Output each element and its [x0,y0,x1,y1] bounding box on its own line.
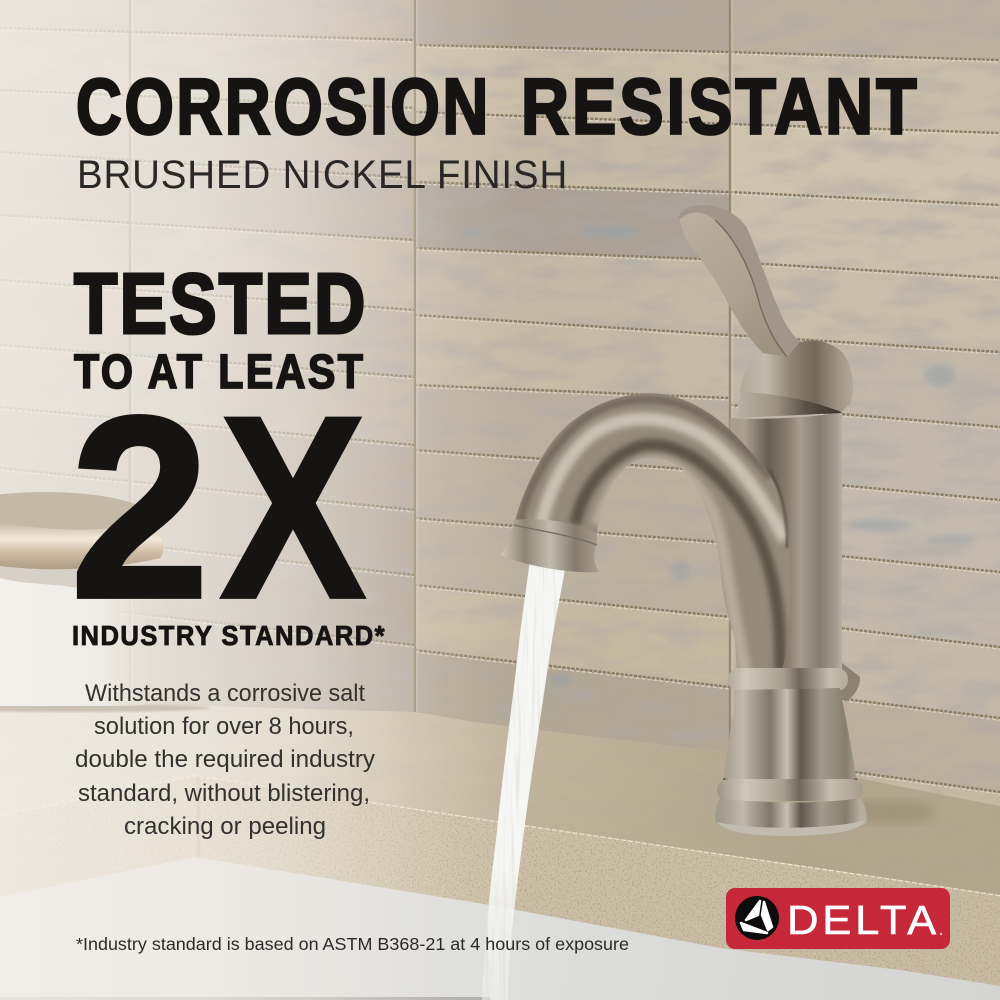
faucet [500,205,935,836]
collar ring [728,668,848,691]
logo wordmark: DELTA [787,898,940,943]
lever front face [679,212,787,357]
white basin of the sink [0,857,1000,1000]
icon: delta triangle mark [735,896,779,940]
claim: tested to at least 2x [70,256,386,653]
handle lever [678,205,802,357]
drain lift lever [838,663,860,702]
running water stream [482,564,565,1000]
footnote: *Industry standard is based on ASTM B368-21 at 4 hours of exposure [76,934,629,954]
claim: tested to at least 2x: TESTED [74,256,368,351]
description text: cracking or peeling [124,813,326,840]
description text: double the required industry [75,746,376,773]
handle dome cap [740,340,853,412]
description text [75,680,376,840]
claim: tested to at least 2x: 2 [70,363,210,653]
bottom edge strip [0,997,490,1000]
lower ring [717,779,863,801]
title: corrosion resistant: CORROSION [76,63,491,151]
grey gasket [716,820,866,836]
description text: solution for over 8 hours, [94,713,354,740]
delta logo [726,888,950,949]
spout nozzle [500,519,599,572]
claim: tested to at least 2x: X [220,362,366,652]
shadow on counter [845,800,935,824]
countertop front edge [0,770,1000,990]
neck under the handle dome [737,390,842,418]
tapered base [723,688,857,782]
description text: standard, without blistering, [78,780,370,807]
foot of the base [715,798,867,832]
curved spout [516,393,790,668]
faucet body column [730,412,842,672]
title: corrosion resistant [76,63,920,151]
title: corrosion resistant: RESISTANT [521,63,920,151]
claim: tested to at least 2x: TO AT LEAST [74,346,365,399]
decorative jar with lid [0,492,210,712]
description text: Withstands a corrosive salt [85,680,365,707]
countertop surface [114,706,1000,895]
subtitle: BRUSHED NICKEL FINISH [77,152,568,197]
claim: tested to at least 2x: INDUSTRY STANDARD* [72,620,386,651]
